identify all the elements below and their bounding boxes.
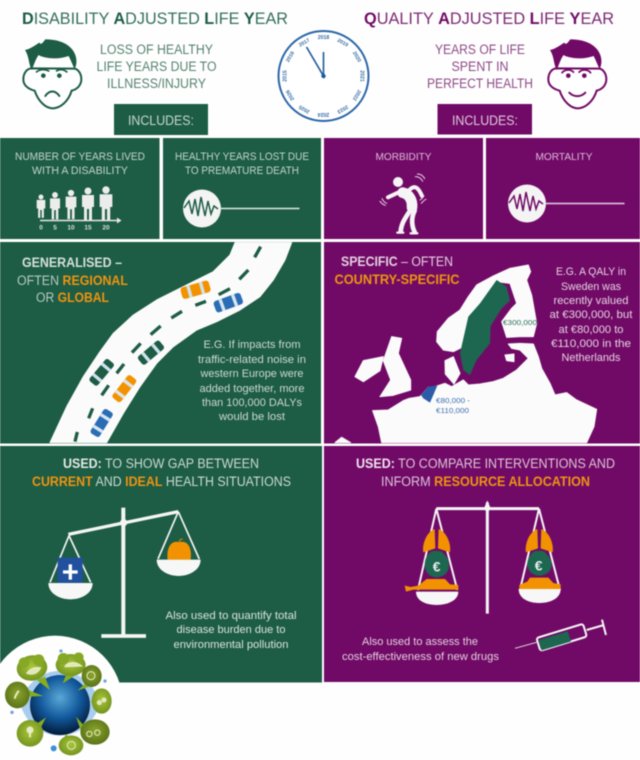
icon: syringe (515, 620, 606, 651)
icon: left lungs, money and car (405, 529, 458, 605)
panel: used QALY (324, 446, 640, 682)
text: QALY also used: cost-effectiveness of new drugs (342, 651, 499, 663)
icon: clock: 2015 (282, 70, 288, 82)
panel: mortality: MORTALITY (536, 151, 592, 163)
heading: generalised: OFTEN REGIONAL (17, 273, 128, 288)
text: DALY also used: environmental pollution (174, 639, 288, 651)
text: QALY definition (427, 42, 533, 91)
illustration: balanced scales (405, 500, 561, 614)
icon: clock: 2023 (336, 103, 349, 114)
text: DALY example: traffic-related noise in (198, 354, 306, 366)
text: QALY definition: SPENT IN (452, 59, 508, 74)
text: DALY example: than 100,000 DALYs (202, 397, 302, 409)
label: Netherlands value: €80,000 - (436, 396, 471, 405)
logo: globe with green clouds (0, 636, 123, 760)
panel: years lived with disability (0, 138, 160, 239)
heading: generalised: OR GLOBAL (36, 290, 109, 305)
heading: specific: COUNTRY-SPECIFIC (334, 272, 460, 287)
map: northern Europe (335, 265, 597, 443)
heading: used DALY (32, 456, 291, 489)
icon: clock: 2019 (336, 38, 349, 49)
label: Sweden value: €300,000 (503, 318, 537, 327)
panel: used DALY (0, 446, 322, 682)
text: DALY example (198, 339, 306, 423)
car: green middle (137, 340, 165, 366)
text: DALY definition (96, 42, 216, 91)
icon: clock: 2020 (351, 51, 362, 64)
text: QALY example: at €300,000, but (550, 309, 632, 321)
text: QALY definition: PERFECT HEALTH (427, 76, 533, 91)
text: QALY example: Netherlands (562, 352, 621, 364)
illustration: road with cars (50, 243, 292, 443)
icon: flatline pulse (508, 184, 624, 222)
heading: used QALY (356, 456, 615, 489)
text: DALY definition: ILLNESS/INJURY (107, 76, 206, 91)
panel: mortality (486, 138, 640, 239)
panel: morbidity (324, 138, 483, 239)
icon: happy face (548, 39, 606, 108)
panel: healthy years lost (163, 138, 321, 239)
icon: clock: 2016 (285, 50, 296, 63)
icon: orange apple (167, 539, 191, 560)
text: QALY definition: YEARS OF LIFE (435, 42, 525, 57)
text: DALY example: would be lost (218, 411, 285, 423)
icon: clock (278, 31, 368, 121)
car: green lower (88, 358, 115, 387)
text: DALY definition: LIFE YEARS DUE TO (96, 59, 216, 74)
heading: generalised (17, 255, 128, 305)
panel: years lived with disability: 15 (84, 224, 92, 232)
panel: specific (324, 242, 640, 444)
car: blue lower (90, 408, 114, 438)
panel: years lived with disability: WITH A DISABILITY (32, 165, 129, 177)
icon: right lungs, money and car (519, 529, 561, 603)
heading: used DALY: CURRENT AND IDEAL HEALTH SITUATIONS (32, 474, 291, 489)
panel: years lived with disability: 20 (102, 224, 110, 232)
panel: healthy years lost: TO PREMATURE DEATH (185, 165, 299, 177)
panel: years lived with disability: 10 (67, 224, 75, 232)
heading: used QALY: INFORM RESOURCE ALLOCATION (381, 474, 590, 489)
text: QALY example (550, 266, 632, 364)
text: QALY example: E.G. A QALY in (556, 266, 626, 278)
text: DALY definition: LOSS OF HEALTHY (100, 42, 213, 57)
icon: flatline pulse (183, 190, 300, 228)
icon: clock: 2025 (298, 103, 311, 114)
country: Sweden (460, 280, 510, 375)
icon: right lungs, money and car: € (535, 557, 543, 573)
title: Quality Adjusted Life Year: QUALITY ADJUSTED LIFE YEAR (364, 10, 614, 28)
icon: clock: 2017 (298, 38, 311, 49)
panel: morbidity: MORBIDITY (376, 151, 432, 163)
country: Netherlands (421, 386, 437, 403)
text: DALY example: E.G. If impacts from (204, 339, 300, 351)
car: blue top (213, 292, 244, 313)
text: DALY also used (166, 610, 296, 651)
text: QALY also used (342, 636, 499, 663)
heading: specific (334, 254, 460, 287)
title: Disability Adjusted Life Year: DISABILITY ADJUSTED LIFE YEAR (22, 10, 288, 28)
icon: clock: 2026 (285, 88, 296, 101)
box: DALY includes: INCLUDES: (128, 113, 194, 128)
text: QALY example: €110,000 in the (551, 338, 631, 350)
box: DALY includes (114, 104, 208, 135)
icon: clock: 2024 (318, 111, 329, 117)
panel: years lived with disability: 5 (53, 224, 57, 232)
illustration: tilted scales (48, 508, 201, 636)
text: QALY also used: Also used to assess the (362, 636, 478, 648)
box: QALY includes (438, 104, 532, 134)
car: orange lower (111, 374, 137, 403)
panel: healthy years lost: HEALTHY YEARS LOST DUE (175, 151, 309, 163)
icon: clock: 2021 (358, 70, 364, 82)
panel: generalised (0, 242, 321, 444)
icon: sad face (23, 39, 81, 108)
text: DALY example: added together, more (200, 383, 304, 395)
label: Netherlands value: €110,000 (436, 406, 469, 415)
text: DALY example: western Europe were (200, 368, 304, 380)
panel: years lived with disability: NUMBER OF YEARS LIVED (15, 151, 145, 163)
text: QALY example: at €80,000 to (558, 324, 624, 336)
label: Netherlands value (436, 396, 471, 415)
icon: left lungs, money and car: € (433, 559, 441, 575)
box: QALY includes: INCLUDES: (452, 113, 518, 128)
panel: years lived with disability: 0 (39, 224, 43, 232)
icon: clock: 2022 (351, 89, 362, 102)
heading: generalised: GENERALISED – (22, 255, 122, 270)
text: DALY also used: Also used to quantify total (166, 610, 296, 622)
icon: clock: 2018 (318, 35, 329, 41)
text: QALY example: recently valued (554, 295, 628, 307)
text: DALY also used: disease burden due to (176, 624, 286, 636)
icon: person in pain (380, 174, 426, 233)
car: orange top (180, 280, 211, 300)
icon: growing people (37, 186, 112, 221)
heading: used QALY: USED: TO COMPARE INTERVENTIONS AND (356, 456, 615, 471)
icon: blue medical box (58, 558, 83, 583)
heading: specific: SPECIFIC – OFTEN (341, 254, 453, 269)
text: QALY example: Sweden was (561, 281, 621, 293)
heading: used DALY: USED: TO SHOW GAP BETWEEN (63, 456, 259, 471)
